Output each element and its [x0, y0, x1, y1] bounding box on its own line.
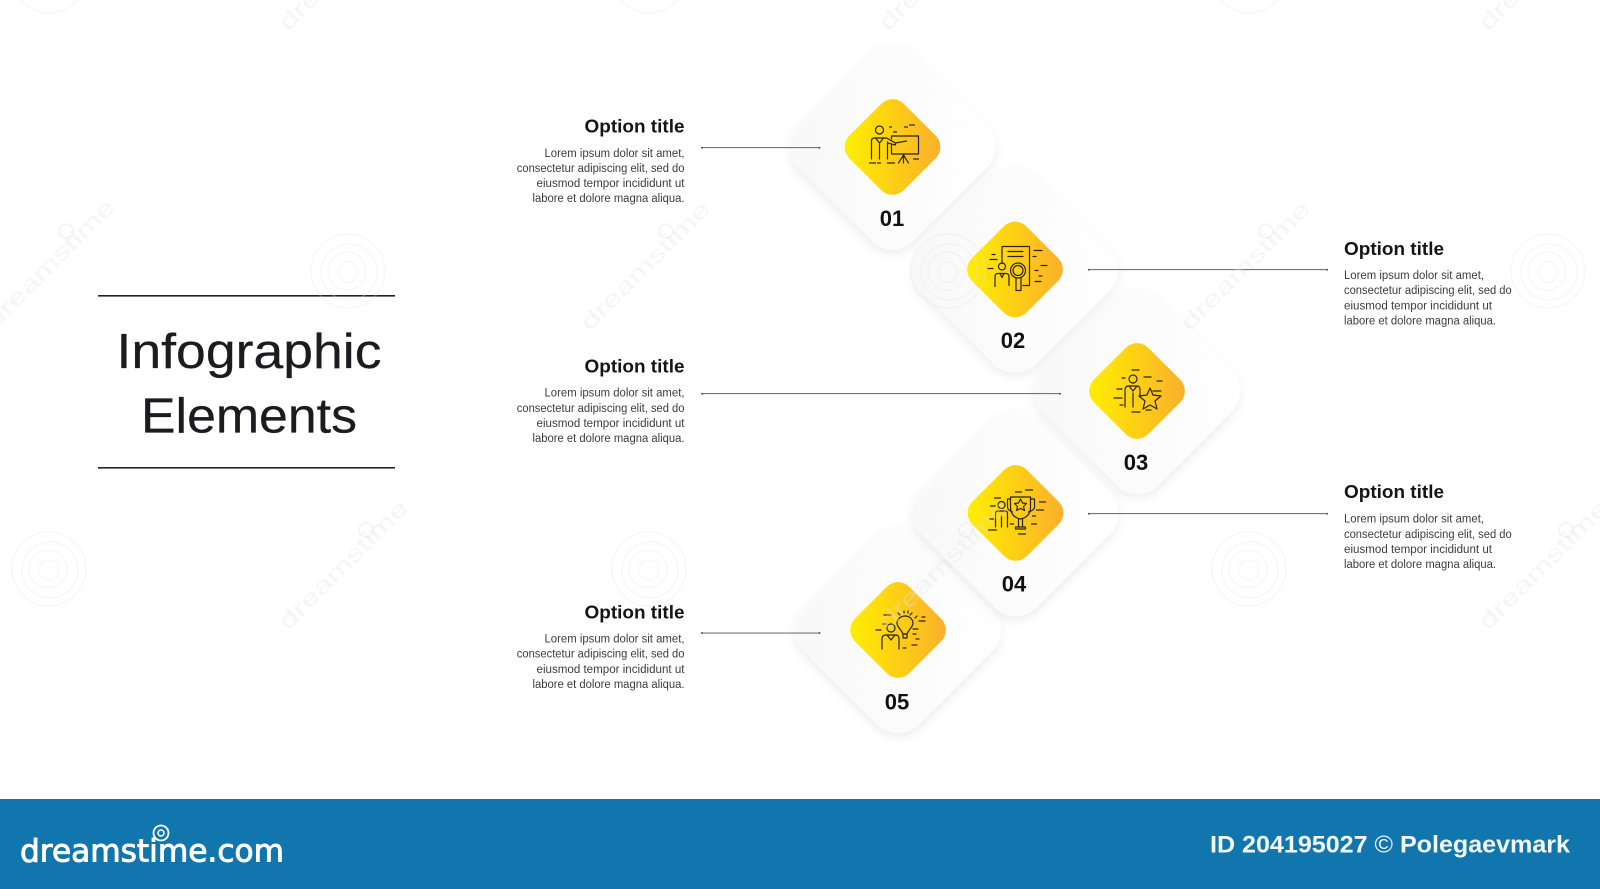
diamond 5: [844, 576, 952, 684]
diamond 1: [838, 93, 947, 201]
title block: [98, 295, 395, 469]
watermark text: dreamstime: [1473, 495, 1600, 635]
option text 4: consectetur adipiscing elit, sed do: [1344, 529, 1512, 541]
footer bar: [0, 799, 1600, 889]
option text 1: labore et dolore magna aliqua.: [532, 193, 684, 205]
option text 3: eiusmod tempor incididunt ut: [536, 418, 685, 430]
option text 4: eiusmod tempor incididunt ut: [1344, 544, 1493, 556]
watermark text: dreamstime: [1175, 196, 1315, 336]
number 03: 03: [1124, 450, 1148, 475]
image id and credit: ID 204195027 © Polegaevmark: [1210, 832, 1571, 858]
title: Infographic: [116, 325, 382, 379]
option text 2: [1344, 238, 1512, 328]
option text 1: consectetur adipiscing elit, sed do: [517, 163, 684, 175]
diamond 2: [961, 215, 1069, 324]
option text 5: [517, 602, 685, 691]
icon: person with trophy: [988, 490, 1046, 534]
option text 4: labore et dolore magna aliqua.: [1344, 559, 1496, 571]
title bottom rule: [98, 467, 395, 469]
option text 1: eiusmod tempor incididunt ut: [536, 178, 685, 190]
connector line 4: [1088, 513, 1328, 515]
watermark text: dreamstime: [273, 495, 413, 635]
number 05: 05: [885, 690, 909, 714]
title: Elements: [141, 390, 357, 444]
card 1 base: [777, 31, 1008, 262]
option text 4: [1344, 481, 1512, 571]
option text 5: labore et dolore magna aliqua.: [532, 679, 684, 691]
option text 2: consectetur adipiscing elit, sed do: [1344, 285, 1512, 297]
option text 1: [517, 116, 685, 205]
option text 3: Lorem ipsum dolor sit amet,: [544, 388, 684, 400]
watermark text: dreamstime: [873, 495, 1013, 635]
option text 4: Lorem ipsum dolor sit amet,: [1344, 514, 1484, 526]
option text 4: Option title: [1344, 481, 1444, 502]
connector line 5: [701, 632, 820, 634]
connector line 1: [701, 147, 820, 149]
number 02: 02: [1001, 328, 1025, 353]
card 4 base: [900, 398, 1131, 628]
connector line 3: [701, 393, 1061, 395]
icon: presenter with board: [870, 125, 918, 163]
step 1 card: [777, 31, 1008, 262]
card 3 base: [1022, 276, 1252, 506]
step 2 card: [900, 154, 1130, 385]
step 3 card: [1022, 276, 1252, 506]
watermark small swirls: [59, 224, 1573, 537]
dreamstime logo: dreamstime.com: [20, 834, 284, 870]
title: [116, 325, 382, 444]
option text 1: Lorem ipsum dolor sit amet,: [544, 148, 684, 160]
watermark text: [0, 0, 1600, 635]
card 2 base: [900, 154, 1130, 385]
option text 5: consectetur adipiscing elit, sed do: [517, 649, 684, 661]
diamond 4: [961, 459, 1070, 567]
card 5 base: [783, 515, 1013, 745]
step 4 card: [900, 398, 1131, 628]
option text 2: eiusmod tempor incididunt ut: [1344, 300, 1493, 312]
connector line 2: [1088, 269, 1328, 271]
icon: person with star: [1114, 370, 1162, 412]
option text 3: labore et dolore magna aliqua.: [532, 433, 684, 445]
option text 5: Option title: [584, 602, 684, 623]
option text 2: Lorem ipsum dolor sit amet,: [1344, 270, 1484, 282]
option text 2: Option title: [1344, 238, 1444, 259]
number 01: 01: [880, 206, 904, 231]
icon: person with document and magnifier: [988, 246, 1047, 290]
option text 5: Lorem ipsum dolor sit amet,: [544, 634, 684, 646]
diamond 3: [1083, 337, 1191, 445]
icon: person with lightbulb: [876, 611, 925, 649]
number 04: 04: [1002, 572, 1027, 596]
option text 5: eiusmod tempor incididunt ut: [536, 664, 685, 676]
option text 1: Option title: [584, 116, 684, 137]
footer background: [0, 799, 1600, 889]
option text 3: consectetur adipiscing elit, sed do: [517, 403, 684, 415]
option text 3: [517, 356, 685, 445]
step 5 card: [783, 515, 1013, 745]
option text 2: labore et dolore magna aliqua.: [1344, 316, 1496, 328]
watermark text: dreamstime: [575, 196, 715, 336]
option text 3: Option title: [584, 356, 684, 377]
title top rule: [98, 295, 395, 297]
watermark spirals: [12, 0, 1585, 606]
